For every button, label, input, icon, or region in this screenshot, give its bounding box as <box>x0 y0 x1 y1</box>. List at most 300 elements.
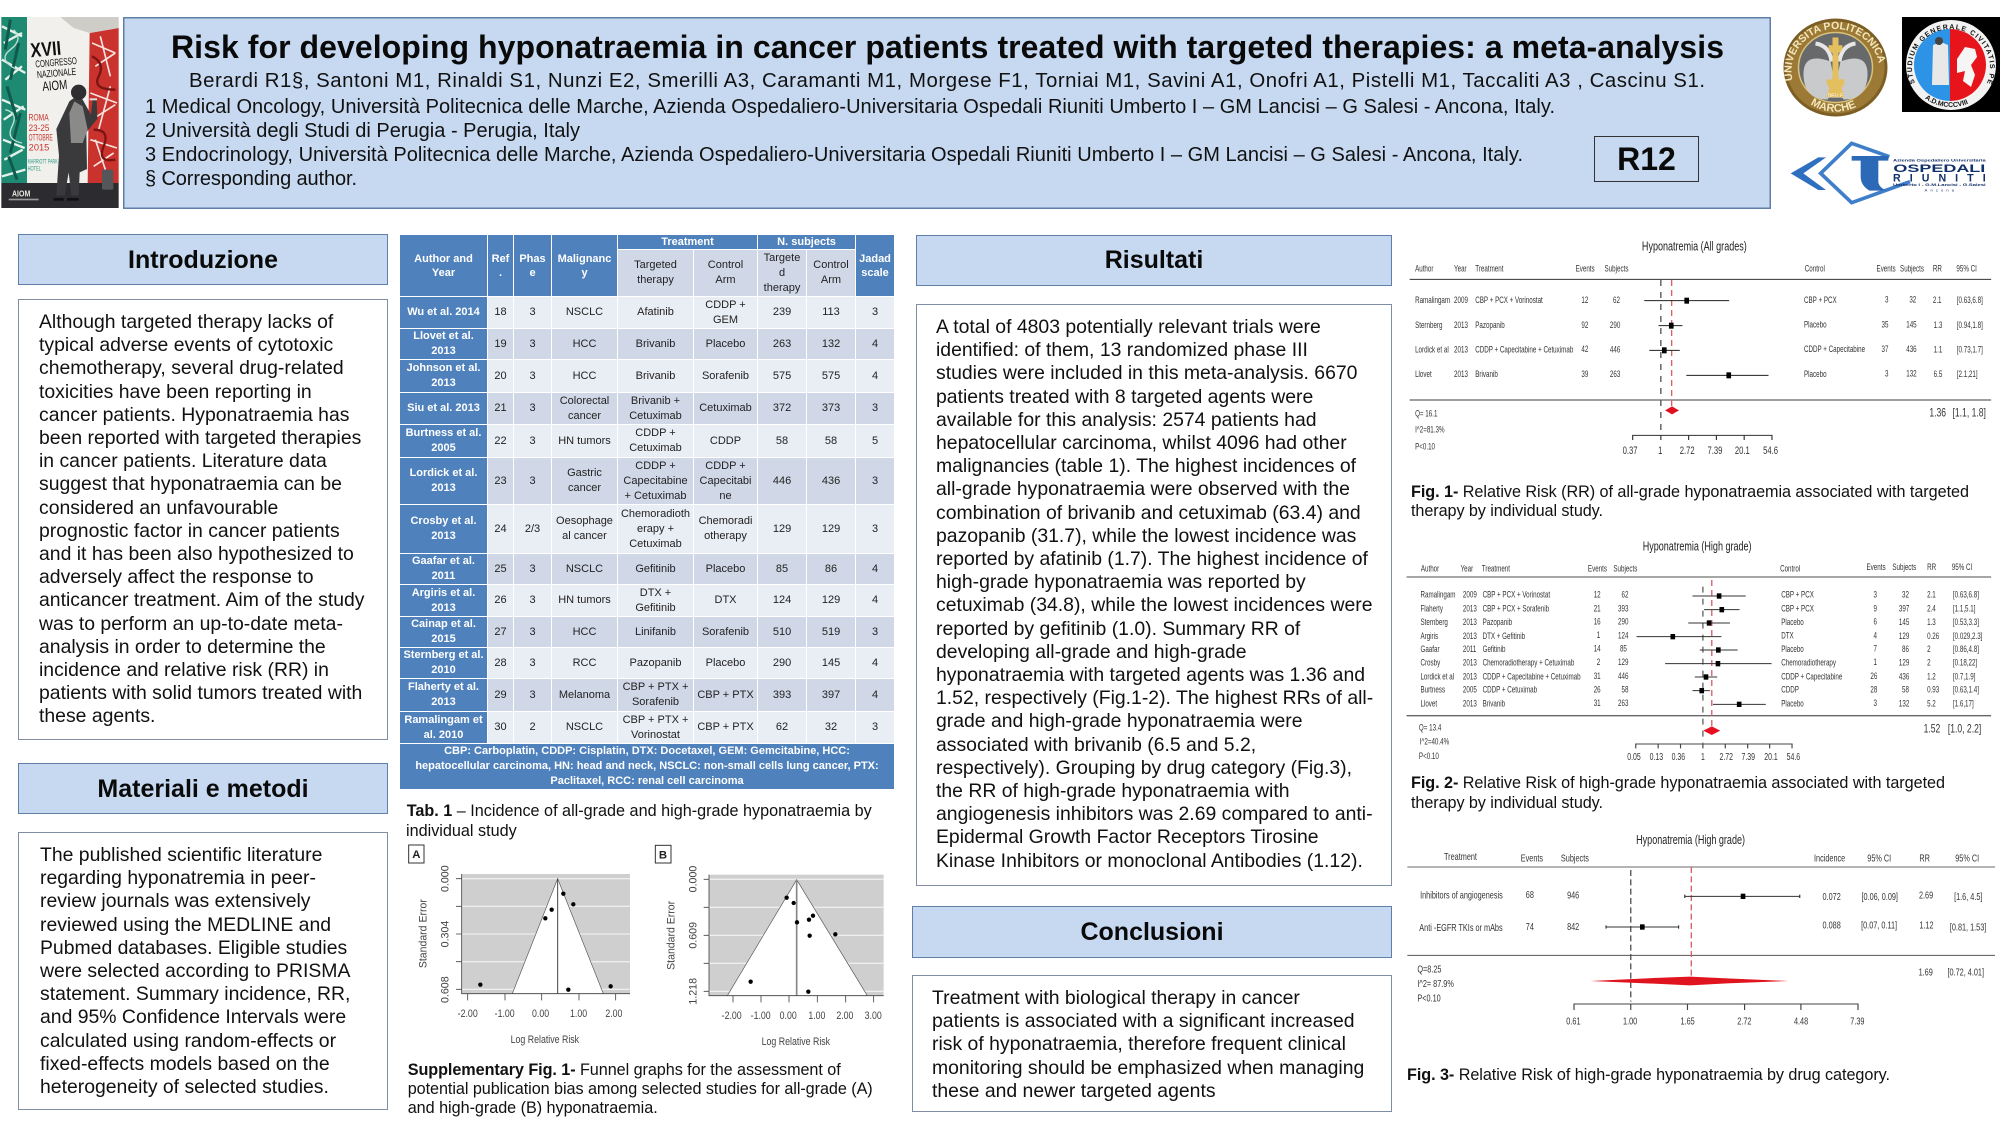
study rows: Lordick et al <box>1415 345 1449 355</box>
study rows: 129 <box>1899 631 1909 641</box>
text block: results: angiogenesis inhibitors was 2.69 compared to anti- <box>936 803 1373 825</box>
figure 3 caption: Fig. 3- Relative Risk of high-grade hyponatraemia by drug category. <box>1407 1066 1890 1084</box>
study rows: 62 <box>1621 589 1628 600</box>
table header: Wu et al. 2014 <box>407 306 480 318</box>
logo: Università Politecnica delle Marche: UNIVERSITA POLITECNICA <box>1784 22 1886 81</box>
table header: 145 <box>822 656 840 668</box>
text block: methods <box>18 832 388 1110</box>
category rows: 0.088 <box>1823 920 1841 931</box>
study rows: 397 <box>1899 604 1909 614</box>
axis labels: Standard Error <box>418 899 430 968</box>
study rows: 2 <box>1927 644 1931 654</box>
table header: Brivanib <box>636 338 675 350</box>
table header: HN tumors <box>558 434 611 446</box>
affiliations: § Corresponding author. <box>145 168 357 190</box>
heterogeneity statistics: Q=8.25 <box>1417 964 1442 975</box>
poster date text <box>28 112 58 172</box>
table header: Johnson et al. <box>407 362 480 374</box>
table header: 22 <box>494 434 507 446</box>
table header: Control <box>813 259 849 271</box>
text block: results: reported by gefitinib (1.0). Summary RR of <box>936 618 1300 640</box>
plot area with funnel <box>462 874 630 994</box>
study rows: Llovet <box>1415 369 1432 379</box>
table header: Crosby et al. <box>410 515 477 527</box>
summary diamond <box>1591 977 1788 985</box>
axis labels: 3.00 <box>865 1010 883 1023</box>
table header: 575 <box>822 370 840 382</box>
study rows: 58 <box>1621 684 1628 695</box>
study rows: Ramalingam <box>1420 590 1455 600</box>
table header: NSCLC <box>566 721 603 733</box>
table header: Cetuximab <box>629 442 682 454</box>
hospital name: Azienda Ospedaliero Universitaria <box>1893 159 1987 163</box>
study rows: 16 <box>1594 617 1601 627</box>
poster title text: CONGRESSO <box>35 56 78 71</box>
text block: results: grade and high-grade hyponatraemia were <box>936 710 1303 732</box>
text block: introduction: anticancer treatment. Aim of the study <box>39 589 364 611</box>
table header: CBP + PTX <box>697 688 754 700</box>
text block: results: cetuximab (34.8), while the lowest incidences were <box>936 594 1372 616</box>
table header: scale <box>861 266 889 278</box>
study rows: 145 <box>1899 617 1909 627</box>
text block: methods: Pubmed databases. Eligible studies <box>40 937 347 959</box>
table header: Targete <box>764 252 800 264</box>
study rows: [0.73,1.7] <box>1957 345 1983 355</box>
red graffiti band <box>60 17 119 183</box>
table header: al. 2010 <box>424 728 463 740</box>
study rows: CDDP + Cetuximab <box>1483 685 1537 695</box>
table header: otherapy <box>704 530 747 542</box>
study rows: Lordick et al <box>1420 671 1454 682</box>
table header: 85 <box>776 562 788 574</box>
funnel plot A <box>408 844 630 1047</box>
table header: 397 <box>822 688 840 700</box>
panel letter B <box>656 846 671 863</box>
x axis: 0.61 <box>1566 1016 1581 1027</box>
column headers: Treatment <box>1444 851 1477 862</box>
confidence intervals <box>1606 894 1800 930</box>
table header: CDDP + <box>635 460 676 472</box>
column headers: Subjects <box>1605 263 1629 274</box>
x axis: 1 <box>1701 751 1705 762</box>
table header: DTX <box>714 594 736 606</box>
study rows: 1.3 <box>1927 617 1936 627</box>
text block: methods: calculated using random-effects or <box>40 1030 336 1052</box>
table header: 239 <box>773 306 791 318</box>
axis labels: 0.000 <box>688 866 700 893</box>
logo: Università Politecnica delle Marche: MARCHE <box>1810 98 1856 112</box>
study rows <box>1415 294 1983 379</box>
table header <box>400 235 894 789</box>
table header: Arm <box>715 274 736 286</box>
column headers: Events <box>1521 852 1544 864</box>
table header: Burtness et al. <box>406 427 481 439</box>
table header: 2013 <box>431 482 456 494</box>
table header: 510 <box>773 626 791 638</box>
text block: results: associated with brivanib (6.5 and 5.2, <box>936 734 1256 756</box>
table header: 4 <box>872 370 878 382</box>
table header: 2013 <box>431 530 456 542</box>
poster title text: NAZIONALE <box>37 67 77 81</box>
poster title text <box>30 36 80 95</box>
text block: results: Kinase Inhibitors or monoclonal Antibodies (1.12). <box>936 850 1363 872</box>
heterogeneity statistics: I^2= 87.9% <box>1417 978 1454 989</box>
study rows: [1.6,17] <box>1953 698 1974 709</box>
heterogeneity statistics: P<0.10 <box>1415 441 1435 452</box>
study rows: 1 <box>1597 630 1600 640</box>
table header: 3 <box>529 434 536 446</box>
text block: conclusions <box>912 975 1392 1112</box>
table header: Linifanib <box>635 626 676 638</box>
poster date text: MARRIOTT PARK <box>28 158 58 165</box>
table header: HN tumors <box>558 594 611 606</box>
poster title text: XVII <box>30 38 62 62</box>
study rows: Placebo <box>1804 319 1827 330</box>
x axis: 2.72 <box>1680 445 1695 457</box>
x axis: 20.1 <box>1735 445 1750 457</box>
study rows: DTX + Gefitinib <box>1483 631 1525 641</box>
green graffiti band <box>1 17 27 183</box>
text block: methods: statement. Summary incidence, RR, <box>40 983 350 1005</box>
study rows: CBP + PCX <box>1781 604 1814 614</box>
rules and reference lines <box>1407 867 1995 1002</box>
abstract code box R12 <box>1594 136 1698 182</box>
heterogeneity statistics: P<0.10 <box>1419 751 1439 761</box>
table header: 2 <box>529 721 536 733</box>
study rows: 32 <box>1909 294 1916 305</box>
study rows: 4 <box>1873 630 1877 641</box>
table header: e <box>529 266 536 278</box>
study rows: Pazopanib <box>1483 617 1512 627</box>
text block: methods: The published scientific literature <box>40 844 322 866</box>
x axis: 20.1 <box>1764 751 1778 762</box>
study rows: 92 <box>1581 320 1588 330</box>
logo: Ospedali Riuniti Ancona <box>1790 141 1987 205</box>
summary estimate <box>1924 722 1981 736</box>
study rows: Pazopanib <box>1475 320 1505 330</box>
study rows: [0.63,1.4] <box>1953 685 1979 695</box>
study rows: 124 <box>1618 630 1629 641</box>
heading: Introduzione: Introduzione <box>128 246 278 274</box>
heading: Materiali e metodi: Materiali e metodi <box>97 775 309 803</box>
table header: 3 <box>529 562 536 574</box>
table header: 3 <box>529 688 536 700</box>
study rows: 2 <box>1597 657 1600 667</box>
text block: introduction: adversely affect the response to <box>39 566 314 588</box>
table header: 124 <box>773 594 791 606</box>
text block: methods: regarding hyponatremia in peer- <box>40 867 316 889</box>
table header: Chemoradioth <box>621 508 690 520</box>
table header: Siu et al. 2013 <box>407 402 480 414</box>
study rows: 2013 <box>1463 671 1477 682</box>
study rows: 1.2 <box>1927 671 1936 682</box>
study rows: CDDP + Capecitabine <box>1804 344 1865 354</box>
study rows: 28 <box>1870 684 1877 695</box>
table header: Cetuximab <box>699 402 752 414</box>
table header: Brivanib <box>636 370 675 382</box>
table header: HCC <box>573 626 596 638</box>
category rows: 946 <box>1567 890 1579 901</box>
study rows: 263 <box>1618 698 1628 708</box>
column headers: Control <box>1780 563 1800 574</box>
column headers: Incidence <box>1814 852 1845 864</box>
study rows: 39 <box>1581 369 1588 379</box>
table header: 32 <box>825 721 837 733</box>
title: Risk for developing hyponatraemia in cancer patients treated with targeted therapies: a meta-analysis <box>171 29 1724 65</box>
category rows: 0.072 <box>1823 891 1841 902</box>
study rows: [0.18,22] <box>1953 658 1977 668</box>
table header: 2015 <box>431 633 456 645</box>
x axis: 54.6 <box>1763 445 1778 457</box>
category rows: 68 <box>1526 889 1534 900</box>
text block: results: respectively). Grouping by drug category (Fig.3), <box>936 757 1352 779</box>
table header: d <box>779 266 785 278</box>
table header: Placebo <box>706 656 745 668</box>
x axis <box>1566 1004 1865 1027</box>
study rows: Chemoradiotherapy <box>1781 657 1836 668</box>
text block: conclusions: these and newer targeted agents <box>932 1080 1216 1102</box>
abstract code box R12: R12 <box>1617 141 1676 177</box>
study rows: 2013 <box>1463 617 1477 627</box>
study rows: Placebo <box>1781 644 1804 654</box>
table header: Sorafenib <box>702 370 749 382</box>
axis labels: -2.00 <box>722 1010 742 1023</box>
table header: 23 <box>494 474 507 486</box>
table header: Chemoradi <box>699 515 752 527</box>
study rows: 446 <box>1610 345 1620 355</box>
study rows: Placebo <box>1781 617 1804 627</box>
table header: Treatment <box>661 236 714 248</box>
x axis <box>1623 435 1778 457</box>
study rows: CBP + PCX + Sorafenib <box>1483 604 1549 614</box>
text block: results: A total of 4803 potentially relevant trials were <box>936 316 1321 338</box>
table header: 3 <box>529 370 536 382</box>
confidence intervals <box>1637 593 1772 707</box>
column headers: Events <box>1877 263 1896 274</box>
text block: introduction <box>18 299 388 740</box>
header banner <box>123 17 1771 209</box>
text block: methods: and 95% Confidence Intervals were <box>40 1006 346 1028</box>
axis labels: 0.609 <box>688 922 700 949</box>
table header: 58 <box>825 434 837 446</box>
heterogeneity statistics: Q= 13.4 <box>1419 723 1442 733</box>
study rows: 1 <box>1873 657 1877 667</box>
table header: 19 <box>494 338 507 350</box>
heading: Materiali e metodi <box>18 763 388 814</box>
table footnote <box>400 744 894 789</box>
table caption <box>406 802 873 840</box>
text block: introduction: incidence and relative risk (RR) in <box>39 659 329 681</box>
study rows: 85 <box>1620 644 1627 654</box>
supplementary figure caption: potential publication bias among selected studies for all-grade (A) <box>408 1080 873 1098</box>
table header: 3 <box>529 402 536 414</box>
study rows: 21 <box>1594 603 1601 614</box>
panel: Materiali e metodi <box>18 763 388 1110</box>
summary estimate: 1.36 <box>1929 406 1946 420</box>
table header: 3 <box>872 522 878 534</box>
study rows: 26 <box>1870 671 1877 681</box>
study rows: [0.63,6.8] <box>1957 295 1983 305</box>
table header: 2013 <box>431 696 456 708</box>
table header: 129 <box>773 522 791 534</box>
study rows: 2.4 <box>1927 604 1936 614</box>
table header: Year <box>432 266 455 278</box>
category rows: Anti -EGFR TKIs or mAbs <box>1419 922 1503 933</box>
study rows: CDDP + Capecitabine + Cetuximab <box>1483 671 1581 682</box>
table header: 3 <box>872 306 878 318</box>
study rows: 12 <box>1581 295 1588 305</box>
table header: Sorafenib <box>702 626 749 638</box>
table header: Gefitinib <box>635 562 676 574</box>
supplementary figure caption: Supplementary Fig. 1- Funnel graphs for the assessment of <box>408 1061 841 1079</box>
table header: 2/3 <box>525 522 540 534</box>
text block: results: reported by afatinib (1.7). The highest incidence of <box>936 548 1368 570</box>
poster bottom strip: AIOM <box>12 188 30 198</box>
table: study characteristics <box>400 235 894 789</box>
column headers: Events <box>1866 562 1886 572</box>
table header: therapy <box>637 274 674 286</box>
affiliations: 2 Università degli Studi di Perugia - Perugia, Italy <box>145 120 580 142</box>
study rows: 14 <box>1594 644 1601 654</box>
study rows: Argiris <box>1420 631 1438 641</box>
text block: introduction: was to perform an up-to-date meta- <box>39 613 343 635</box>
text block: methods: heterogeneity of selected studies. <box>40 1076 329 1098</box>
text block: conclusions: Treatment with biological therapy in cancer <box>932 987 1300 1009</box>
text block: conclusions: risk of hyponatraemia, therefore frequent clinical <box>932 1033 1346 1055</box>
table header: CDDP + <box>705 460 746 472</box>
study rows: Crosby <box>1420 657 1440 668</box>
table header: 29 <box>494 688 507 700</box>
text block: conclusions: patients is associated with a significant increased <box>932 1010 1355 1032</box>
figure 1 caption: Fig. 1- Relative Risk (RR) of all-grade hyponatraemia associated with targeted <box>1411 483 1969 501</box>
table header: Gefitinib <box>635 602 676 614</box>
study rows: 12 <box>1594 589 1601 600</box>
table header: Pazopanib <box>630 656 682 668</box>
panel: Risultati <box>916 235 1392 886</box>
text block: methods: review journals was extensively <box>40 890 311 912</box>
study rows: Placebo <box>1781 698 1804 709</box>
figure 2 caption: Fig. 2- Relative Risk of high-grade hyponatraemia associated with targeted <box>1411 774 1945 792</box>
table header: cancer <box>568 410 601 422</box>
x axis: 4.48 <box>1794 1016 1808 1027</box>
study rows: Brivanib <box>1483 698 1505 709</box>
axis labels: 2.00 <box>605 1008 623 1021</box>
category rows: 842 <box>1567 921 1579 932</box>
study rows: 0.26 <box>1927 631 1939 641</box>
axis labels <box>418 866 623 1047</box>
table header: 2013 <box>431 377 456 389</box>
text block: introduction: chemotherapy, several drug-related <box>39 357 344 379</box>
confidence intervals <box>1644 298 1768 378</box>
study rows <box>1420 589 1982 709</box>
logo: Università degli Studi di Perugia <box>1902 17 2000 112</box>
panel letter A <box>409 845 424 863</box>
study rows: 62 <box>1613 295 1620 305</box>
study rows: 436 <box>1906 344 1917 354</box>
column headers: RR <box>1927 562 1936 572</box>
heading: Conclusioni <box>912 906 1392 958</box>
column headers: 95% CI <box>1956 263 1977 274</box>
table header: 3 <box>529 474 536 486</box>
study rows: Sternberg <box>1420 617 1448 627</box>
table header: CBP + PTX + <box>623 681 688 693</box>
affiliations: 3 Endocrinology, Università Politecnica delle Marche, Azienda Ospedaliero-Universitaria Ospedali Riuniti Umberto I – GM Lancisi – G Salesi - Ancona, Italy. <box>145 144 1523 166</box>
category rows: [0.06, 0.09] <box>1861 891 1898 902</box>
table header: 21 <box>494 402 507 414</box>
study rows: 290 <box>1618 617 1628 627</box>
heterogeneity statistics <box>1415 409 1445 452</box>
category rows: [0.81, 1.53] <box>1950 921 1986 933</box>
text block: results: hepatocellular carcinoma, whilst 4096 had other <box>936 432 1347 454</box>
study rows: 31 <box>1594 698 1601 708</box>
column headers: Subjects <box>1561 852 1589 864</box>
axis labels: -1.00 <box>751 1010 771 1023</box>
forest plot: high-grade hyponatraemia <box>1406 540 1992 762</box>
hospital name: Ancona <box>1925 188 1955 193</box>
study rows: 35 <box>1882 319 1888 330</box>
study rows: Gefitinib <box>1483 644 1505 654</box>
table header: 3 <box>529 626 536 638</box>
text block: results: malignancies (table 1). The highest incidences of <box>936 455 1356 477</box>
axis labels: Standard Error <box>666 901 678 970</box>
study rows: CBP + PCX + Vorinostat <box>1475 295 1543 305</box>
table header: CDDP <box>710 434 741 446</box>
figure 2 caption: therapy by individual study. <box>1411 794 1603 812</box>
table header: Gaafar et al. <box>412 555 475 567</box>
column headers: Year <box>1454 263 1467 274</box>
table header: 3 <box>529 306 536 318</box>
rules and reference lines <box>1407 577 1991 743</box>
man painting the wall <box>54 85 113 201</box>
text block: methods: were selected according to PRISMA <box>40 960 350 982</box>
x axis: 1.00 <box>1623 1016 1637 1027</box>
axis labels <box>666 866 883 1049</box>
poster date text: OTTOBRE <box>29 133 53 143</box>
study rows: 129 <box>1899 658 1909 668</box>
table header: 5 <box>872 434 878 446</box>
table header: 3 <box>872 474 878 486</box>
text block: introduction: patients with solid tumors treated with <box>39 682 362 704</box>
axis labels: 1.00 <box>570 1008 588 1021</box>
study rows: 436 <box>1899 671 1909 682</box>
study rows: Ramalingam <box>1415 295 1450 305</box>
table header: 20 <box>494 370 507 382</box>
column headers: Author <box>1421 563 1440 574</box>
table header: 4 <box>872 338 878 350</box>
table header: 62 <box>776 721 788 733</box>
study rows: [0.029,2.3] <box>1953 631 1982 641</box>
study rows: 1.1 <box>1934 345 1942 355</box>
category rows: Inhibitors of angiogenesis <box>1420 890 1503 901</box>
category rows: [1.6, 4.5] <box>1954 891 1982 902</box>
poster date text: 2015 <box>29 142 49 152</box>
table header: Control <box>708 259 743 271</box>
study rows: 42 <box>1581 344 1588 354</box>
chart title: Hyponatremia (All grades) <box>1642 240 1747 254</box>
column headers: 95% CI <box>1952 562 1972 572</box>
table header: 393 <box>773 688 791 700</box>
axis labels: 1.00 <box>809 1010 826 1023</box>
study rows: 129 <box>1618 657 1628 667</box>
axis labels: Log Relative Risk <box>511 1034 579 1047</box>
table header: ne <box>719 490 732 502</box>
column headers: Treatment <box>1482 563 1511 574</box>
study rows: 2009 <box>1454 295 1468 305</box>
chart title: Hyponatremia (High grade) <box>1643 540 1752 554</box>
x axis: 0.36 <box>1672 751 1685 762</box>
table header: 25 <box>494 562 507 574</box>
logo: Università Politecnica delle Marche <box>1784 18 1888 116</box>
